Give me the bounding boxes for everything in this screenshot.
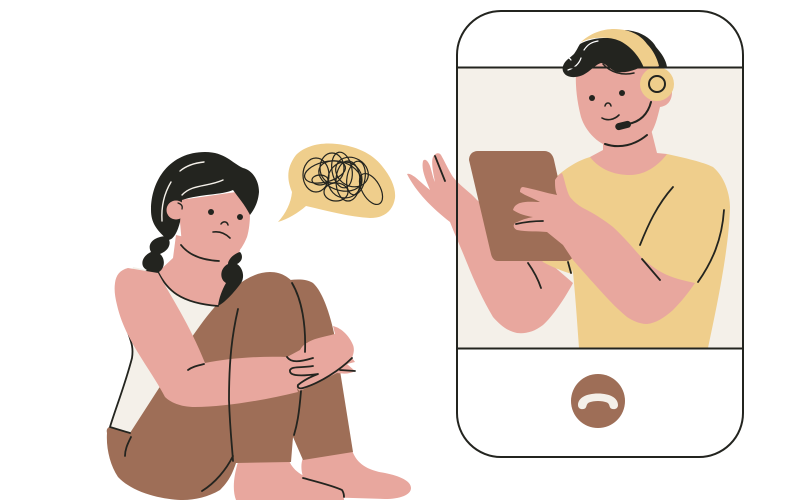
icon: hang up call button (571, 374, 625, 428)
bubble shape (278, 143, 395, 222)
girl finger lines (287, 357, 355, 388)
agent hair highlights (563, 41, 598, 70)
agent neck (590, 125, 667, 175)
girl sitting hugging knees (107, 152, 411, 500)
agent near arm lines (516, 187, 724, 282)
agent dark hair behind headset (625, 30, 667, 70)
agent: man with headset (407, 29, 730, 348)
agent headset band (580, 29, 659, 68)
agent headset earcup (640, 67, 674, 101)
girl leg lines (188, 283, 344, 497)
agent face (589, 90, 647, 146)
phone: outer frame (457, 11, 743, 457)
girl hair highlights (162, 162, 223, 221)
girl back leg (280, 279, 353, 460)
agent hair (563, 38, 645, 77)
tablet (469, 151, 575, 261)
girl face (178, 203, 243, 261)
agent microphone (615, 102, 651, 131)
girl shirt (109, 267, 218, 434)
girl neckline and back lines (110, 272, 218, 456)
girl ear (166, 200, 186, 220)
agent far hand lines (435, 156, 571, 288)
girl braid right (218, 252, 243, 306)
speech bubble with scribble (278, 143, 395, 222)
agent shirt (525, 154, 730, 348)
girl pants (107, 272, 308, 500)
girl front arm (115, 268, 298, 407)
agent brow line (603, 64, 634, 74)
agent head (576, 50, 672, 146)
girl neck (158, 235, 240, 306)
girl far hand (287, 326, 355, 391)
girl braid left (125, 236, 170, 312)
girl front foot (234, 458, 344, 500)
agent near arm and hand (513, 173, 695, 324)
agent far arm and hand (407, 153, 573, 333)
girl back foot (301, 450, 411, 499)
girl hair (151, 152, 259, 240)
girl head (180, 190, 250, 263)
phone: screen background (457, 67, 743, 349)
agent shirt patch beneath tablet (540, 258, 574, 274)
tangled scribble (302, 151, 387, 208)
